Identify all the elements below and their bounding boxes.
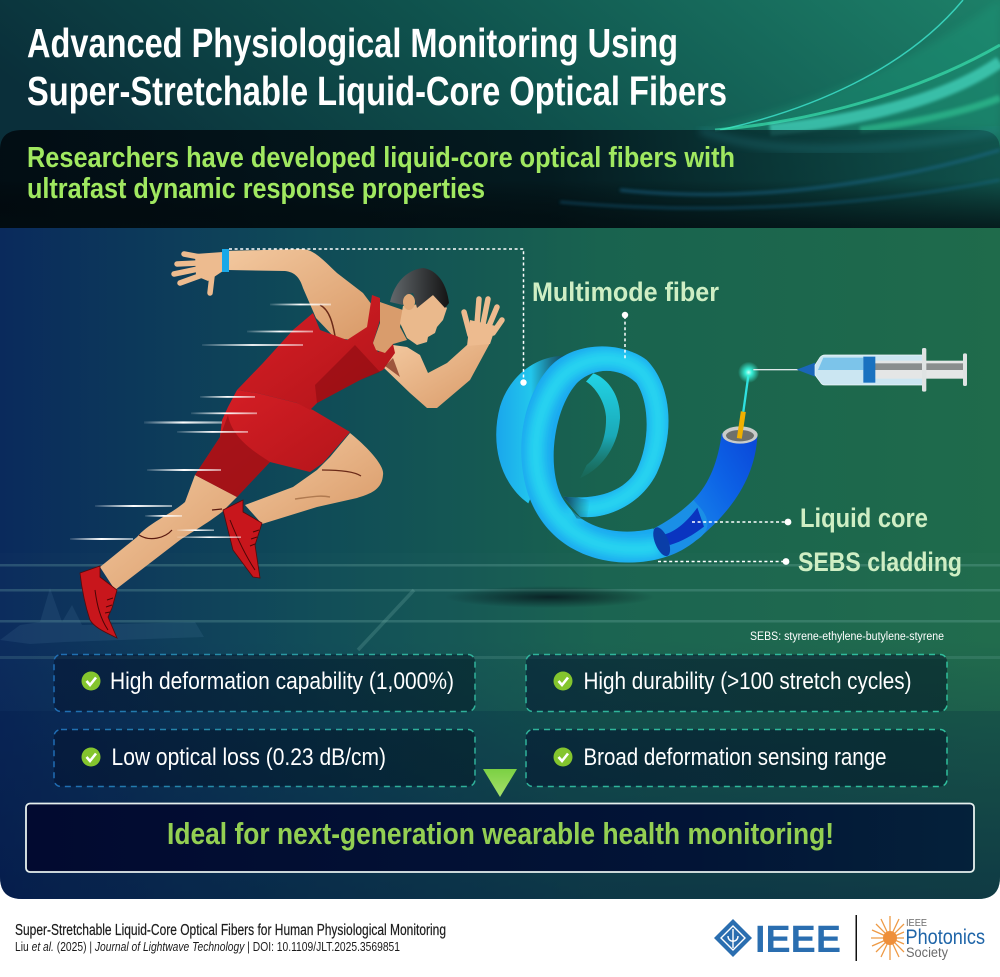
inner ring <box>580 373 620 478</box>
needle hub <box>797 363 815 377</box>
footer citation <box>15 922 446 954</box>
IEEE Photonics Society logo: Photonics <box>906 926 985 949</box>
label: Liquid core: Liquid core <box>800 503 928 533</box>
rear leg <box>100 475 237 590</box>
shorts <box>195 390 350 497</box>
shaded tube passing behind <box>564 496 588 520</box>
glow at fiber tip <box>738 362 759 383</box>
muscle shadow lines <box>385 358 400 377</box>
running track lines <box>0 564 1000 659</box>
main content panel background <box>0 228 1000 900</box>
liquid core <box>663 508 704 545</box>
IEEE logo: IEEE <box>755 919 841 961</box>
sub-heading text: Researchers have developed liquid-core optical fibers with <box>27 142 735 174</box>
feature box: high deformation <box>54 654 475 712</box>
hair <box>390 268 449 308</box>
main coil <box>522 346 668 563</box>
SEBS abbreviation note: SEBS: styrene-ethylene-butylene-styrene <box>750 631 944 643</box>
title: Super-Stretchable Liquid-Core Optical Fibers <box>27 68 727 114</box>
arrow: down triangle <box>483 769 517 797</box>
IEEE Photonics Society logo: IEEE <box>906 917 927 929</box>
needle <box>753 369 798 370</box>
conclusion box: Ideal for next-generation wearable health monitoring! <box>167 816 834 851</box>
IEEE Photonics Society logo <box>871 916 985 960</box>
speed lines <box>70 304 331 540</box>
plunger <box>875 361 965 379</box>
neck <box>373 302 407 353</box>
label: Multimode fiber: Multimode fiber <box>532 277 719 307</box>
leader line: wristband to fiber <box>229 249 527 386</box>
front shoe <box>223 500 262 578</box>
IEEE Photonics Society logo: Society <box>906 945 948 960</box>
tube mouth <box>722 426 758 444</box>
stadium silhouette <box>0 588 204 644</box>
blue end tube <box>693 433 757 540</box>
feature box: broad sensing range <box>526 730 947 786</box>
label: SEBS cladding <box>658 547 962 577</box>
cutaway shell <box>653 500 707 557</box>
label: Liquid core <box>692 503 928 533</box>
title: Advanced Physiological Monitoring Using <box>27 20 678 66</box>
barrel <box>815 355 923 385</box>
sub-heading text <box>27 142 735 205</box>
feature box: low optical loss <box>54 730 475 786</box>
header background with light swooshes <box>0 0 1000 240</box>
back loop <box>496 356 573 503</box>
front leg <box>245 433 383 524</box>
label: SEBS cladding: SEBS cladding <box>798 547 962 577</box>
footer citation: Liu et al. (2025) | Journal of Lightwave Technology | DOI: 10.1109/JLT.2025.3569851 <box>15 939 400 954</box>
runner figure <box>80 249 502 638</box>
sun icon <box>871 916 904 960</box>
title <box>27 20 727 114</box>
logo divider <box>856 915 857 961</box>
cyan fiber <box>743 373 749 412</box>
IEEE logo <box>714 919 841 961</box>
label: Multimode fiber <box>532 277 719 359</box>
face <box>400 295 447 345</box>
optical fiber coil <box>496 337 967 570</box>
conclusion box <box>26 804 974 872</box>
footer citation: Super-Stretchable Liquid-Core Optical Fibers for Human Physiological Monitoring <box>15 922 446 939</box>
sub-heading text: ultrafast dynamic response properties <box>27 173 485 205</box>
feature box: high durability <box>526 654 947 712</box>
rear shoe <box>80 566 117 638</box>
sub-heading banner <box>0 130 1000 228</box>
feature box: broad sensing range: Broad deformation sensing range <box>584 744 886 771</box>
rear arm <box>222 249 372 340</box>
torso <box>237 295 395 410</box>
front hand <box>464 299 502 346</box>
rear hand <box>174 252 223 293</box>
wristband <box>222 249 229 272</box>
front arm <box>383 343 490 408</box>
floor shadow <box>445 586 655 608</box>
feature box: high durability: High durability (>100 stretch cycles) <box>584 668 912 695</box>
cut end opening <box>650 525 674 558</box>
feature box: low optical loss: Low optical loss (0.23 dB/cm) <box>112 744 386 771</box>
syringe <box>753 348 967 392</box>
ear <box>403 294 415 310</box>
feature box: high deformation: High deformation capability (1,000%) <box>110 668 454 695</box>
gold inner fiber <box>739 412 743 438</box>
